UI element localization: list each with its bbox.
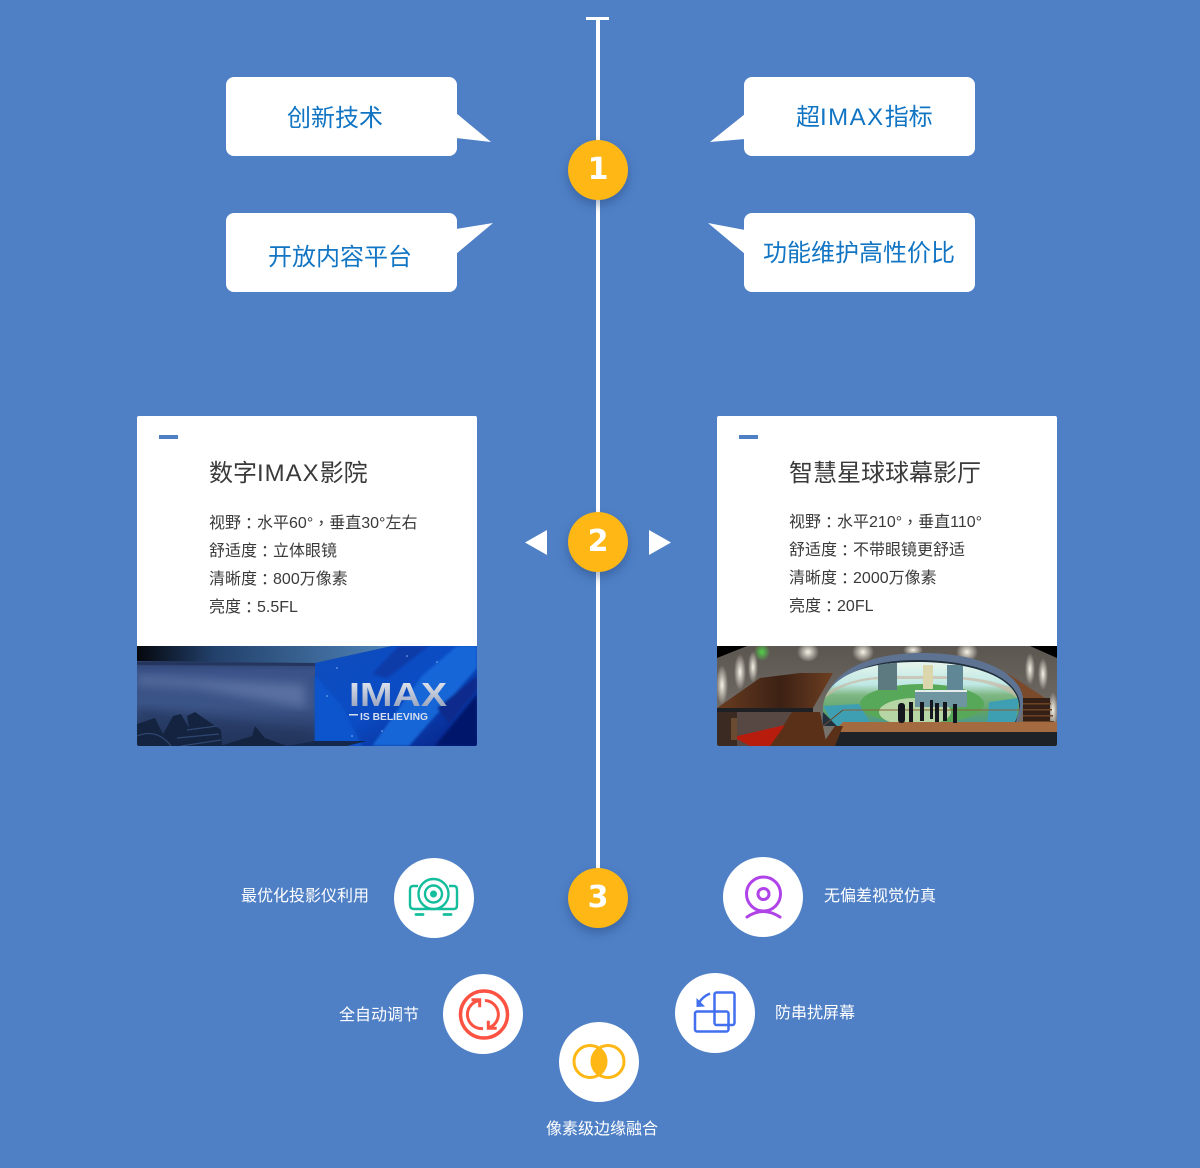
- step 2 badge: [568, 512, 628, 572]
- step 3 badge: [568, 868, 628, 928]
- label: 无偏差视觉仿真: [824, 888, 936, 905]
- panel: digital IMAX theater: [137, 416, 477, 746]
- icon: overlapping circles: [559, 1022, 639, 1102]
- callout: open platform: [226, 213, 457, 292]
- specs: 清晰度：2000万像素: [789, 565, 937, 589]
- callout tails: [457, 114, 744, 254]
- callout: innovation: [226, 77, 457, 156]
- callout: beyond IMAX: 超IMAX指标: [796, 104, 933, 131]
- callout: maintenance value: 功能维护高性价比: [763, 240, 955, 267]
- heading: 数字IMAX影院: [209, 460, 368, 487]
- step 3 badge: 3: [588, 880, 608, 915]
- step 1 badge: 1: [588, 152, 608, 187]
- image: IMAX theater: IS BELIEVING: [360, 712, 428, 723]
- specs: 视野：水平60°，垂直30°左右: [209, 510, 417, 534]
- specs: 舒适度：不带眼镜更舒适: [789, 537, 965, 561]
- icon: auto adjust: [443, 974, 523, 1054]
- step 1 badge: [568, 140, 628, 200]
- specs: [209, 510, 417, 618]
- icon: anti-crosstalk screen: [675, 973, 755, 1053]
- timeline axis: [586, 17, 609, 868]
- callout: open platform: 开放内容平台: [268, 244, 412, 271]
- label: 防串扰屏幕: [775, 1005, 855, 1022]
- image: dome theater: [717, 646, 1057, 746]
- specs: 舒适度：立体眼镜: [209, 538, 337, 562]
- arrow: left: [525, 530, 547, 555]
- specs: 清晰度：800万像素: [209, 566, 348, 590]
- callout: innovation: 创新技术: [287, 105, 383, 132]
- specs: 亮度：20FL: [789, 593, 874, 617]
- label: 最优化投影仪利用: [241, 888, 369, 905]
- step 2 badge: 2: [588, 524, 608, 559]
- icon: projector: [394, 858, 474, 938]
- label: 像素级边缘融合: [546, 1121, 658, 1138]
- label: 全自动调节: [339, 1007, 419, 1024]
- heading: 智慧星球球幕影厅: [789, 460, 981, 487]
- icon: webcam: [723, 857, 803, 937]
- callout: maintenance value: [744, 213, 975, 292]
- specs: 视野：水平210°，垂直110°: [789, 509, 982, 533]
- callout: beyond IMAX: [744, 77, 975, 156]
- image: IMAX theater: [137, 646, 477, 746]
- image: IMAX theater: IMAX: [349, 676, 447, 713]
- arrow: right: [649, 530, 671, 555]
- specs: [789, 509, 982, 617]
- panel: smart globe dome theater: [717, 416, 1057, 746]
- specs: 亮度：5.5FL: [209, 594, 298, 618]
